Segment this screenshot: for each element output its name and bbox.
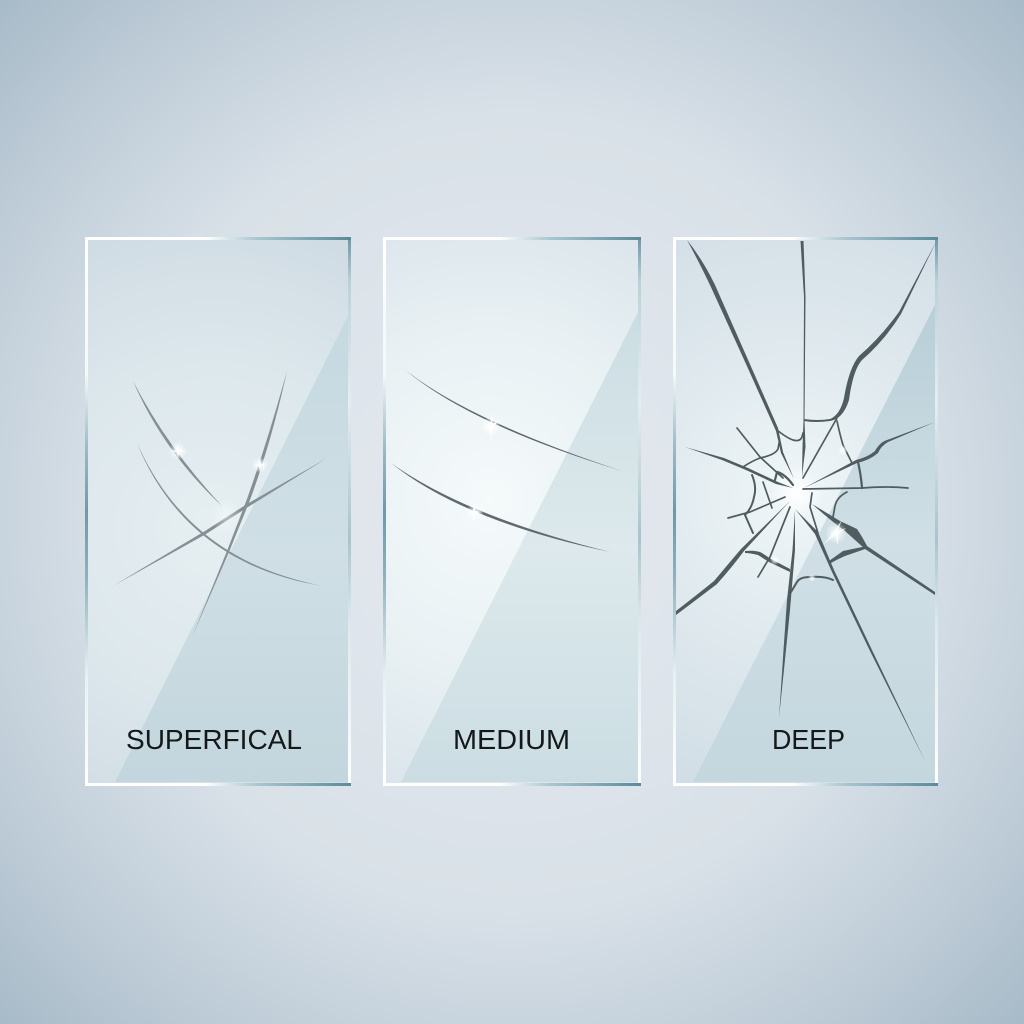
label: superficial: SUPERFICAL xyxy=(126,724,302,755)
panel: deep glass xyxy=(673,237,938,786)
frame: deep xyxy=(673,237,938,786)
frame: superficial xyxy=(85,237,351,786)
glints: superficial xyxy=(169,442,268,532)
diagonal reflection: deep xyxy=(693,305,935,782)
diagonal reflection: superficial xyxy=(115,316,348,782)
panel: medium glass xyxy=(383,237,641,786)
glass pane: medium xyxy=(384,238,640,784)
glass pane: deep xyxy=(674,238,937,784)
scratches: superficial xyxy=(113,371,327,637)
frame: medium xyxy=(383,237,641,786)
label: deep: DEEP xyxy=(772,724,845,755)
glass pane: superficial xyxy=(86,238,350,784)
tapered long cracks xyxy=(676,240,937,763)
thin connecting cracks xyxy=(728,418,908,592)
panel: superficial glass xyxy=(85,237,351,786)
center impact glow xyxy=(771,467,823,519)
label: medium: MEDIUM xyxy=(453,724,570,755)
cracks: deep xyxy=(676,240,937,763)
scratches: medium xyxy=(391,368,622,552)
glints: deep xyxy=(770,445,848,582)
glints: medium xyxy=(466,412,501,524)
diagonal reflection: medium xyxy=(401,312,638,782)
